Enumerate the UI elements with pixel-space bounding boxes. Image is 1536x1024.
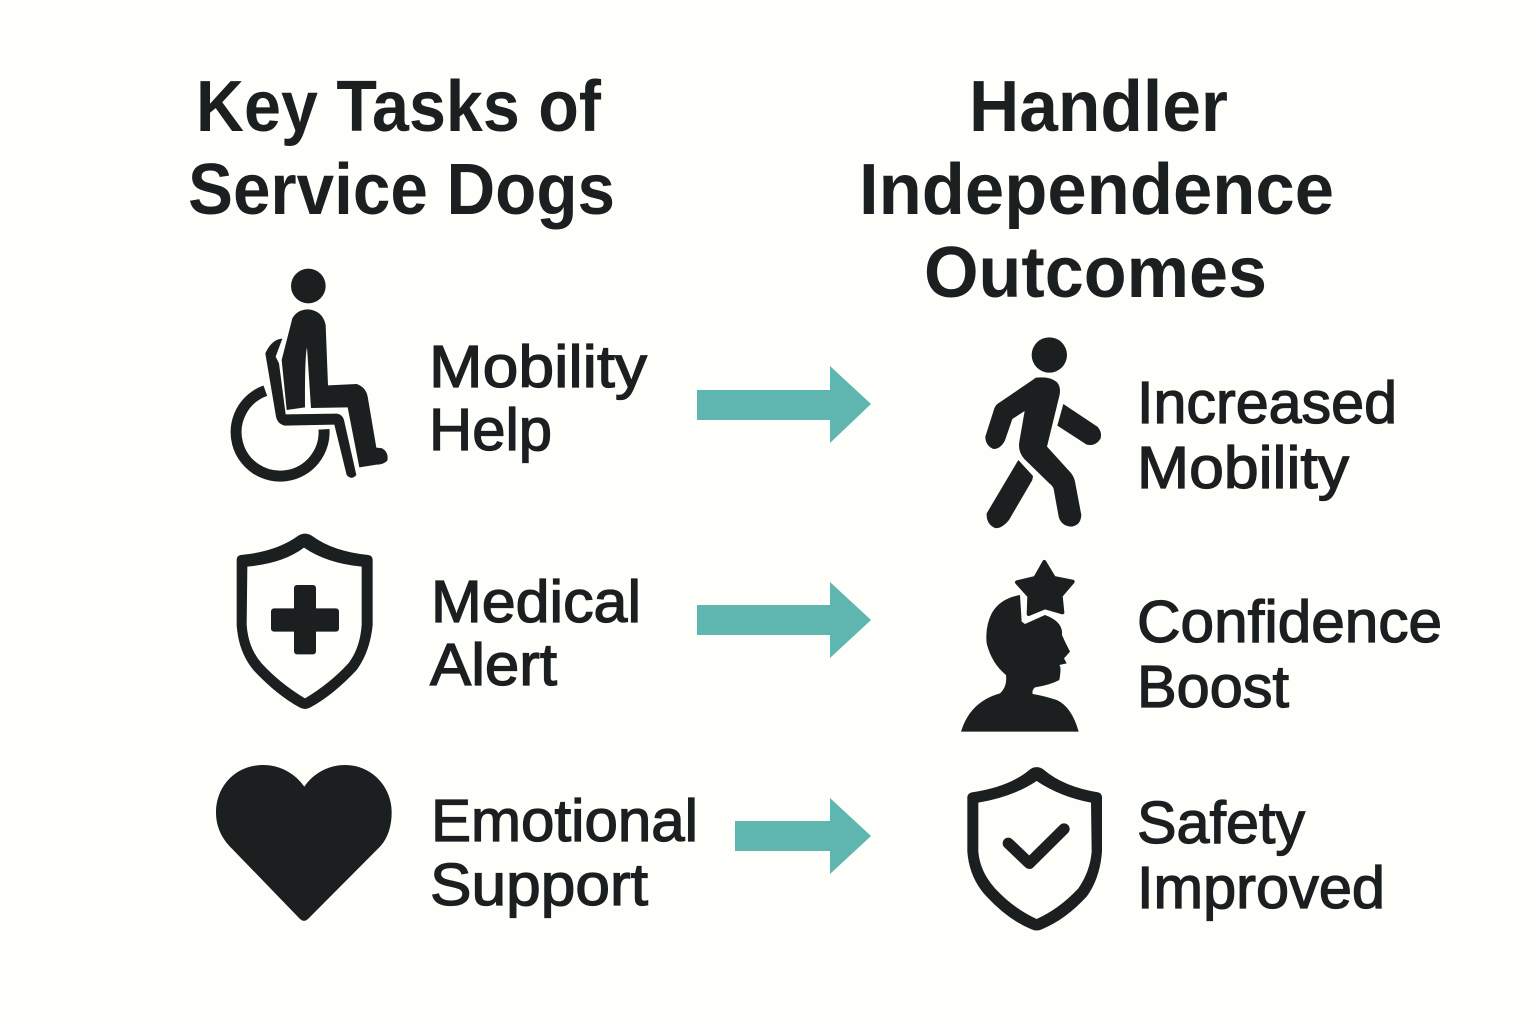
icon: medical shield <box>237 534 373 709</box>
label: increased mobility <box>1137 370 1397 501</box>
label: confidence boost: Confidence <box>1137 589 1442 655</box>
arrow: mobility help to increased mobility <box>697 366 871 443</box>
label: emotional support <box>430 788 698 918</box>
label: medical alert <box>430 569 641 698</box>
label: safety improved: Safety <box>1137 790 1305 856</box>
heading: handler independence outcomes: Outcomes <box>924 233 1267 313</box>
arrow: medical alert to confidence boost <box>697 582 871 658</box>
icon: shield with check <box>967 767 1102 930</box>
label: increased mobility: Mobility <box>1137 435 1350 501</box>
heading: key tasks of service dogs: Key Tasks of <box>196 67 602 147</box>
icon: head with star <box>961 562 1079 732</box>
label: mobility help: Mobility <box>429 334 648 400</box>
label: confidence boost: Boost <box>1137 654 1289 720</box>
label: medical alert: Alert <box>430 632 557 698</box>
label: mobility help <box>429 334 648 463</box>
arrow: emotional support to safety improved <box>735 798 871 874</box>
heading: handler independence outcomes <box>859 67 1334 313</box>
label: emotional support: Support <box>430 852 648 918</box>
label: increased mobility: Increased <box>1137 370 1397 436</box>
icon: heart <box>216 765 392 921</box>
icon: walking person <box>985 337 1101 528</box>
label: medical alert: Medical <box>431 569 641 635</box>
label: safety improved <box>1137 790 1385 921</box>
heading: key tasks of service dogs: Service Dogs <box>188 150 615 230</box>
label: mobility help: Help <box>429 397 552 463</box>
label: safety improved: Improved <box>1137 855 1385 921</box>
label: emotional support: Emotional <box>431 788 698 854</box>
heading: handler independence outcomes: Independence <box>859 150 1334 230</box>
icon: wheelchair user <box>236 269 388 478</box>
label: confidence boost <box>1137 589 1442 720</box>
heading: key tasks of service dogs <box>188 67 615 230</box>
heading: handler independence outcomes: Handler <box>969 67 1228 147</box>
